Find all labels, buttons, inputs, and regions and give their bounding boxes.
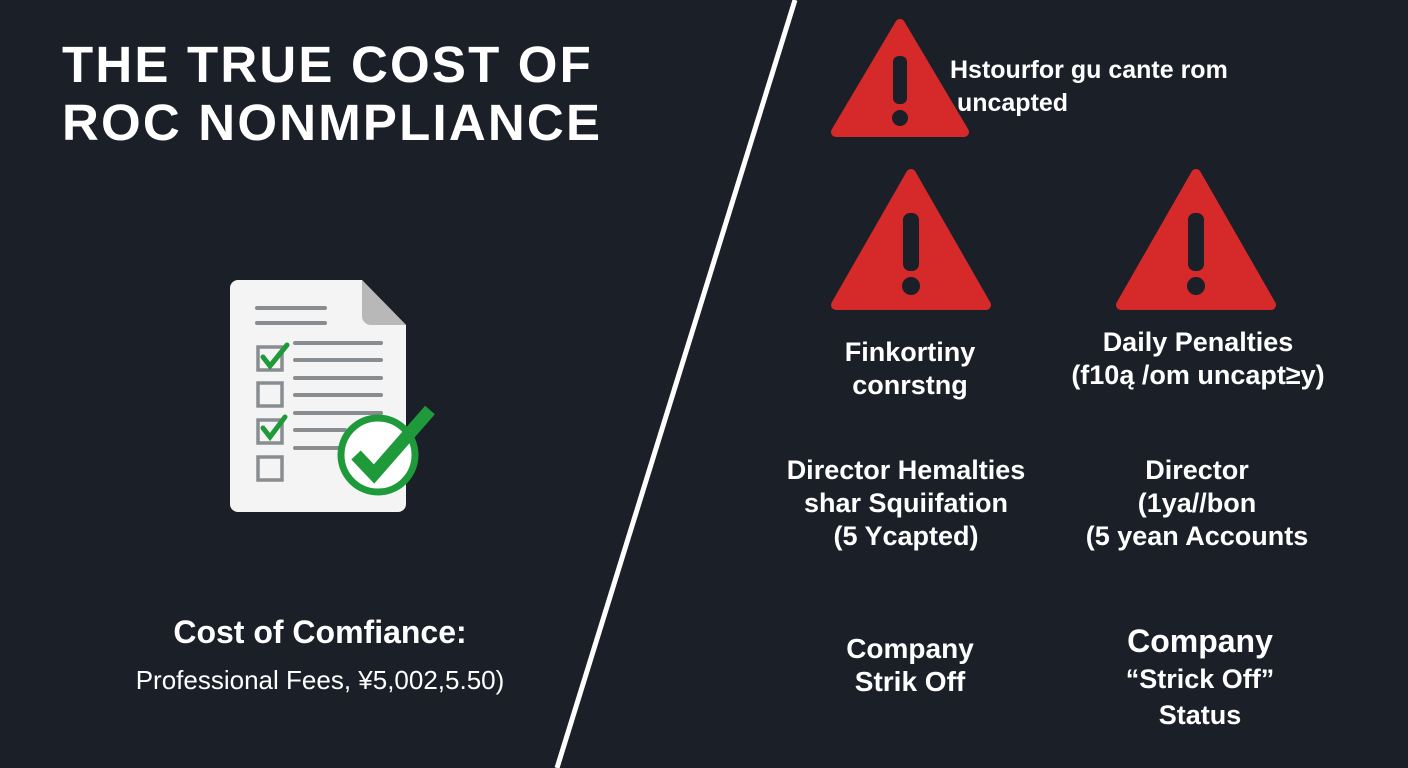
text: left item 1: Finkortiny — [845, 337, 975, 367]
icon: warning right — [1116, 169, 1276, 310]
text: top warning: Hstourfor gu cante rom — [950, 56, 1228, 84]
text: right item 3 — [1126, 623, 1274, 730]
text: right item 3: “Strick Off” — [1126, 664, 1274, 694]
title: ROC NONMPLIANCE — [62, 94, 602, 151]
text: right item 2: (5 yean Accounts — [1086, 521, 1308, 551]
text: left item 1: conrstng — [852, 370, 968, 400]
text: left item 3: Strik Off — [855, 666, 965, 697]
text: left item 3: Company — [846, 633, 974, 664]
text: professional fees: Professional Fees, ¥5,002,5.50) — [136, 665, 504, 695]
title: THE TRUE COST OF — [62, 36, 593, 93]
text: left item 2 — [787, 455, 1025, 551]
icon: warning left — [831, 169, 991, 310]
text: right item 2 — [1086, 455, 1308, 551]
text: left item 2: (5 Ycapted) — [833, 521, 979, 551]
text: right item 1: Daily Penalties — [1103, 327, 1293, 357]
text: left item 2: Director Hemalties — [787, 455, 1025, 485]
text: right item 3: Company — [1127, 623, 1273, 659]
text: left item 2: shar Squiifation — [804, 488, 1008, 518]
text: top warning: uncapted — [957, 89, 1068, 117]
text: left item 1 — [845, 337, 976, 400]
text: right item 3: Status — [1159, 700, 1241, 730]
icon: warning top — [831, 19, 969, 137]
text: right item 2: Director — [1145, 455, 1249, 485]
text: cost of compliance: Cost of Comfiance: — [173, 614, 467, 650]
text: right item 1: (f10ą /om uncapt≥y) — [1071, 360, 1325, 390]
icon: compliance document — [230, 280, 435, 512]
text: left item 3 — [846, 633, 974, 697]
title — [62, 36, 602, 151]
text: right item 1 — [1071, 327, 1325, 390]
text: top warning — [950, 56, 1228, 117]
text: right item 2: (1ya//bon — [1138, 488, 1256, 518]
